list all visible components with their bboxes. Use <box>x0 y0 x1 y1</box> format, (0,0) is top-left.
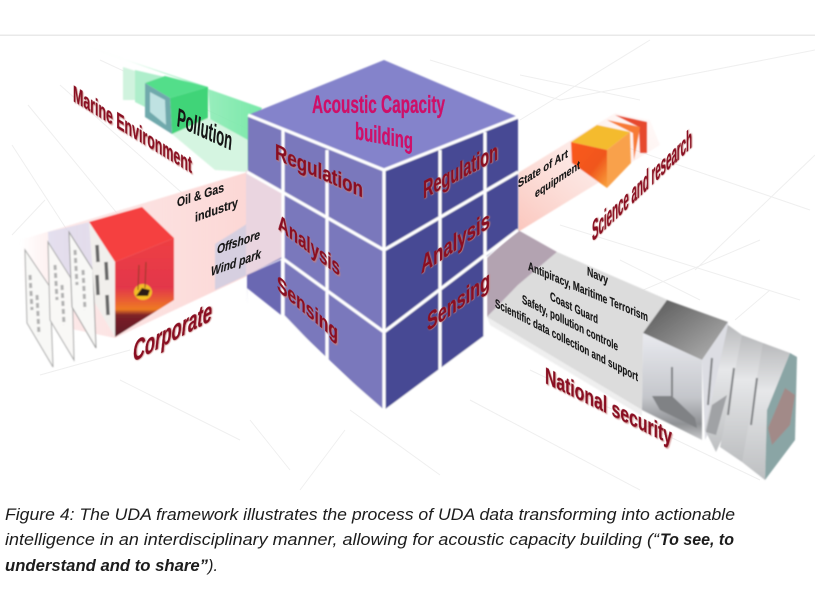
label: offshore wind park <box>211 227 262 279</box>
left face labels <box>275 139 363 347</box>
label: offshore wind park: Wind park <box>211 246 262 279</box>
cube top title: Acoustic Capacity <box>312 91 445 119</box>
cube top title <box>312 91 445 155</box>
label: oil and gas: Oil & Gas <box>177 180 224 210</box>
right face labels: Analysis <box>421 205 490 279</box>
figure caption: intelligence in an interdisciplinary manner, allowing for acoustic capacity building (“ <box>5 530 660 549</box>
panel: marine environment band <box>75 42 262 172</box>
label: state of art <box>518 146 580 201</box>
label: national security roles: Safety, pollution controle <box>522 292 618 354</box>
background perspective grid <box>12 40 815 490</box>
panel: national security band <box>487 230 797 480</box>
label: state of art: State of Art <box>518 146 568 191</box>
label: national security roles: Antipiracy, Maritime Terrorism <box>528 259 648 324</box>
icon: equipment cube <box>571 115 647 188</box>
infographic: Pollution <box>177 102 232 157</box>
figure caption: understand and to share” <box>5 556 208 575</box>
right face labels: Sensing <box>427 265 490 337</box>
panel: science band <box>518 113 660 232</box>
label: national security roles: Scientific data collection and support <box>495 296 638 384</box>
top rule <box>0 34 815 36</box>
figure caption <box>5 505 735 575</box>
icon: ship panels <box>642 300 797 480</box>
label: national security roles <box>495 259 648 384</box>
cube <box>246 60 518 412</box>
label: state of art: equipment <box>535 157 580 201</box>
cube top title: building <box>355 118 413 155</box>
left face labels: Regulation <box>275 139 363 202</box>
label: national security roles: Coast Guard <box>550 289 598 327</box>
figure caption: Figure 4: The UDA framework illustrates the process of UDA data transforming into actionable <box>5 505 735 524</box>
cube grid lines <box>247 115 518 412</box>
panel: corporate band <box>20 172 262 367</box>
icon: pollution cube <box>145 76 208 134</box>
label: offshore wind park: Offshore <box>217 227 260 257</box>
heading: corporate: Corporate <box>133 294 212 369</box>
figure caption: To see, to <box>660 530 734 549</box>
right face labels <box>421 137 498 337</box>
left face labels: Sensing <box>277 271 338 347</box>
cube top face <box>248 60 518 170</box>
cube left face <box>247 115 384 412</box>
cube right face <box>384 117 518 412</box>
label: national security roles: Navy <box>587 264 608 288</box>
heading: national security: National security <box>545 363 672 451</box>
right face labels: Regulation <box>423 137 498 205</box>
icon: oil rig cube <box>89 207 174 337</box>
figure caption: ). <box>206 556 218 575</box>
icon: report cards <box>25 232 96 367</box>
heading: marine environment: Marine Environment <box>73 81 192 179</box>
label: oil and gas: industry <box>195 195 238 225</box>
label: oil and gas <box>177 180 238 225</box>
left face labels: Analysis <box>278 210 340 282</box>
